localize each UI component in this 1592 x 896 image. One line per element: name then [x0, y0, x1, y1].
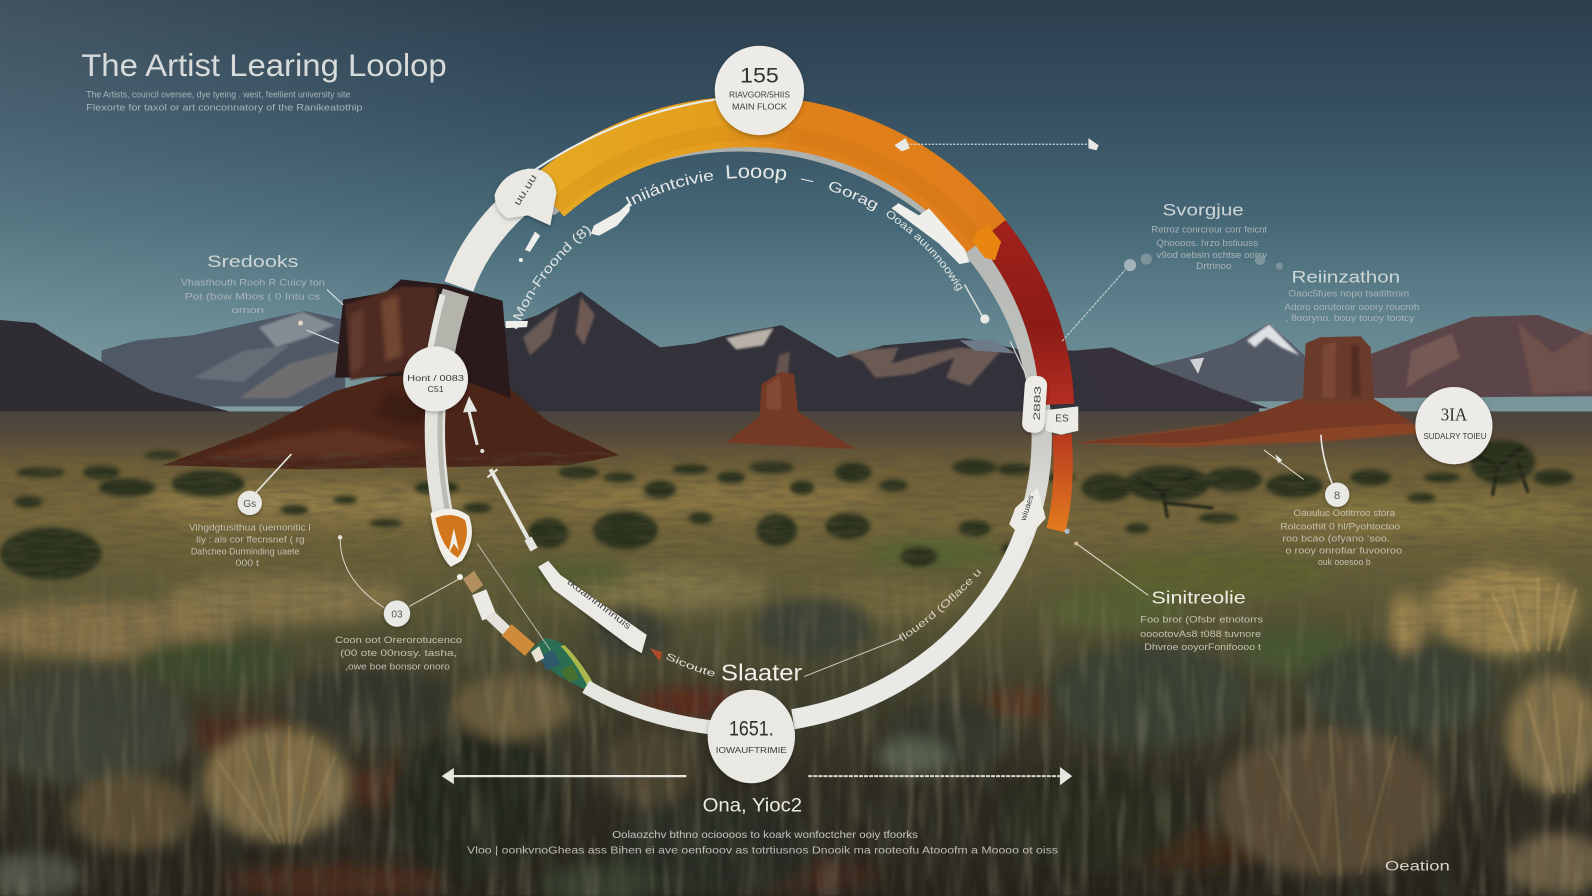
inner ring track, upper part — [548, 142, 1037, 388]
pointer to right tag — [1010, 341, 1027, 378]
far-field dry grass texture — [0, 452, 1592, 645]
sky — [0, 0, 1592, 427]
right stat node — [1415, 387, 1492, 464]
arc title text — [512, 165, 963, 329]
footer credit: Oeation — [1385, 859, 1450, 875]
badge: Gs — [243, 499, 256, 510]
pointer lines — [298, 290, 343, 343]
loop diagram — [425, 100, 1078, 727]
heading: Reiinzathon — [1291, 268, 1400, 286]
right panel: Sinitreolie — [1065, 529, 1264, 652]
left node — [403, 346, 468, 411]
orange ring piece — [507, 630, 530, 650]
left butte — [162, 279, 619, 469]
body: Vhasthouth Rooh R Cuicy ton — [181, 277, 325, 287]
white tool icons on arc — [506, 201, 970, 328]
body: Drtrinoo — [1196, 261, 1232, 271]
heading: Svorgjue — [1163, 201, 1244, 219]
white ring piece two — [489, 615, 508, 632]
bottom node — [708, 690, 795, 783]
top node: RIAVGOR/5HIIS — [729, 91, 791, 100]
body: Oaoc5fues nopo tsaitittrom — [1288, 289, 1409, 299]
left white dashes — [480, 449, 534, 550]
body: tiy : ais cor ffecnsnef ( rg — [196, 534, 305, 544]
arc title text: Gorag — [829, 182, 878, 212]
body: omon — [231, 305, 264, 315]
body — [1140, 615, 1264, 652]
vegetation tone patches — [0, 479, 1592, 896]
right tag — [1021, 375, 1048, 433]
small pointer right — [965, 284, 989, 324]
body — [189, 522, 311, 568]
body: Coon oot Orerorotucenco — [335, 635, 462, 645]
white tube below node — [435, 406, 443, 513]
left arrow — [442, 768, 686, 784]
body — [335, 635, 462, 671]
badge: 8 — [1334, 490, 1340, 502]
body: ouk ooesoo b — [1318, 557, 1371, 567]
inner ring track, lower part — [793, 386, 1042, 719]
top node — [715, 46, 804, 135]
tan block — [463, 571, 483, 593]
red earth band on horizon — [1076, 417, 1442, 447]
right tag: 2883 — [1032, 386, 1043, 421]
arc title text: aMon-Froond (8) — [512, 226, 591, 329]
pointers — [338, 536, 463, 607]
body: roo bcao (ofyano ‘soo. — [1282, 533, 1390, 543]
thin line to palette — [477, 543, 550, 650]
knob at band start — [494, 169, 556, 226]
grey band edge — [425, 295, 443, 380]
ground plain — [0, 411, 1592, 896]
left step 2 — [335, 536, 463, 671]
caption — [467, 830, 1058, 856]
body: , 8ooryno. bouy touoy tootcy — [1285, 313, 1415, 323]
intro text — [86, 90, 363, 113]
curved bottom-right small text: flouerd (Oflace u — [898, 569, 982, 642]
lower orange segment — [1056, 435, 1063, 530]
small red marker — [650, 648, 662, 661]
near-field light grass streaks — [0, 605, 1590, 896]
shrubs and trees — [0, 440, 1574, 580]
amber inner shade — [553, 133, 980, 242]
body: Rolcoothit 0 hl/Pyohtoctoo — [1280, 521, 1400, 531]
center butte — [726, 372, 855, 449]
bottom node: 1651. — [729, 716, 774, 740]
right step — [1264, 435, 1402, 567]
white separator on ring — [1044, 406, 1078, 435]
line to Shaater label — [804, 638, 902, 677]
body: v9od oebsin ochtse ooisy — [1156, 250, 1268, 260]
right stat node: SUDALRY TOIEU — [1423, 432, 1487, 441]
body: Oauuluc Ootitrroo stora — [1294, 508, 1395, 518]
grass blades — [218, 579, 1582, 874]
top node: MAIN FLOCK — [732, 103, 787, 112]
left node: Hont / 0083 — [407, 374, 465, 383]
red arc segment — [992, 231, 1057, 404]
intro text: The Artists, council oversee, dye tyeing . west, feellient university site — [86, 90, 350, 100]
tree silhouettes — [1137, 447, 1528, 518]
body: Retroz conrcrour corr feicnt — [1151, 225, 1268, 235]
lower-right tag: wiuaes — [1018, 494, 1036, 523]
body: Vihgdgtusithua (uemonitic i — [189, 522, 311, 532]
white upper-left band — [459, 185, 538, 286]
foreground bushes — [0, 580, 1592, 896]
pointer — [1065, 529, 1148, 595]
pointer — [256, 454, 291, 493]
body: o rooy onrofiar fuvooroo — [1285, 546, 1402, 556]
body: Qhoooos. hrzo bstiuuss — [1156, 238, 1259, 248]
body: Foo bror (Ofsbr etnotorrs — [1140, 615, 1264, 625]
amber arc segment — [547, 122, 987, 237]
arc title text: Iniiántcivie — [626, 171, 714, 206]
lower-right tag — [1005, 488, 1046, 561]
arc title text: Ooaa auunnoowig — [886, 211, 963, 291]
left panel: Sredooks — [181, 253, 343, 343]
caption: Vloo | oonkvnoGheas ass Bihen ei ave oenfooov as totrtiusnos Dnooik ma rooteofu Atooofm a Moooo ot oiss — [467, 845, 1058, 856]
right arrow — [808, 767, 1072, 785]
label: Ona, Yioc2 — [703, 796, 802, 817]
droplet icon — [430, 509, 472, 567]
badge: 03 — [391, 610, 403, 621]
white label tag — [538, 561, 647, 653]
curved bottom-left small text: Sicoute — [666, 654, 714, 676]
palette icon — [530, 638, 595, 691]
left step 1 — [189, 454, 311, 568]
right panel: Reiinzathon — [1284, 268, 1420, 323]
title: The Artist Learing Loolop — [81, 48, 447, 83]
right stat node: 3IA — [1441, 405, 1468, 425]
body: Adoro oorutoroir ooory roucroh — [1284, 302, 1420, 312]
center bottom label: Slaater — [721, 660, 802, 686]
near-field dark grass streaks — [4, 586, 1590, 896]
body — [1280, 508, 1402, 567]
left node: C51 — [427, 385, 444, 394]
lower-left white ring — [586, 687, 711, 727]
tube shading — [440, 406, 448, 513]
orange end cap — [973, 226, 1001, 260]
white ring piece — [479, 592, 489, 618]
white label tag: tkuainnnnnuis — [565, 577, 633, 632]
bottom node: IOWAUFTRIMIE — [716, 746, 788, 755]
right panel: Svorgjue — [1062, 201, 1283, 341]
arc title text: – — [801, 178, 814, 182]
arc title text: Looop — [726, 165, 786, 184]
body — [1284, 289, 1420, 323]
heading: Sinitreolie — [1151, 587, 1246, 607]
body: ,owe boe bonsor onoro — [345, 661, 450, 671]
body: Pot (bow Mbos ( 0 Intu cs — [185, 292, 321, 302]
body: Dahcheo Durminding uaete — [191, 547, 300, 557]
pointers — [1264, 435, 1332, 484]
top callout arrow — [894, 138, 1099, 151]
body: Dhvroe ooyorFonifoooo t — [1144, 642, 1262, 652]
connector and dots — [1062, 253, 1283, 341]
heading: Sredooks — [207, 253, 298, 271]
bottom timeline — [442, 767, 1072, 856]
intro text: Flexorte for taxol or art conconnatory of the Ranikeatothip — [86, 103, 363, 113]
top node: 155 — [740, 63, 779, 87]
grey left band — [437, 293, 456, 380]
white top edge — [535, 100, 716, 170]
body — [1151, 225, 1268, 271]
distant mountains — [0, 292, 1592, 421]
right butte — [1076, 336, 1413, 443]
body: (00 ote 00nosy. tasha, — [340, 648, 457, 658]
label ES: ES — [1055, 414, 1069, 425]
caption: Oolaozchv bthno ocioooos to koark wonfoctcher ooiy tfoorks — [612, 830, 918, 841]
body: ooootovAs8 t088 tuvnore — [1140, 629, 1261, 639]
upward arrow — [463, 396, 477, 445]
body — [181, 277, 325, 315]
body: 000 t — [236, 558, 260, 568]
knob at band start: uu.uu — [512, 173, 540, 208]
